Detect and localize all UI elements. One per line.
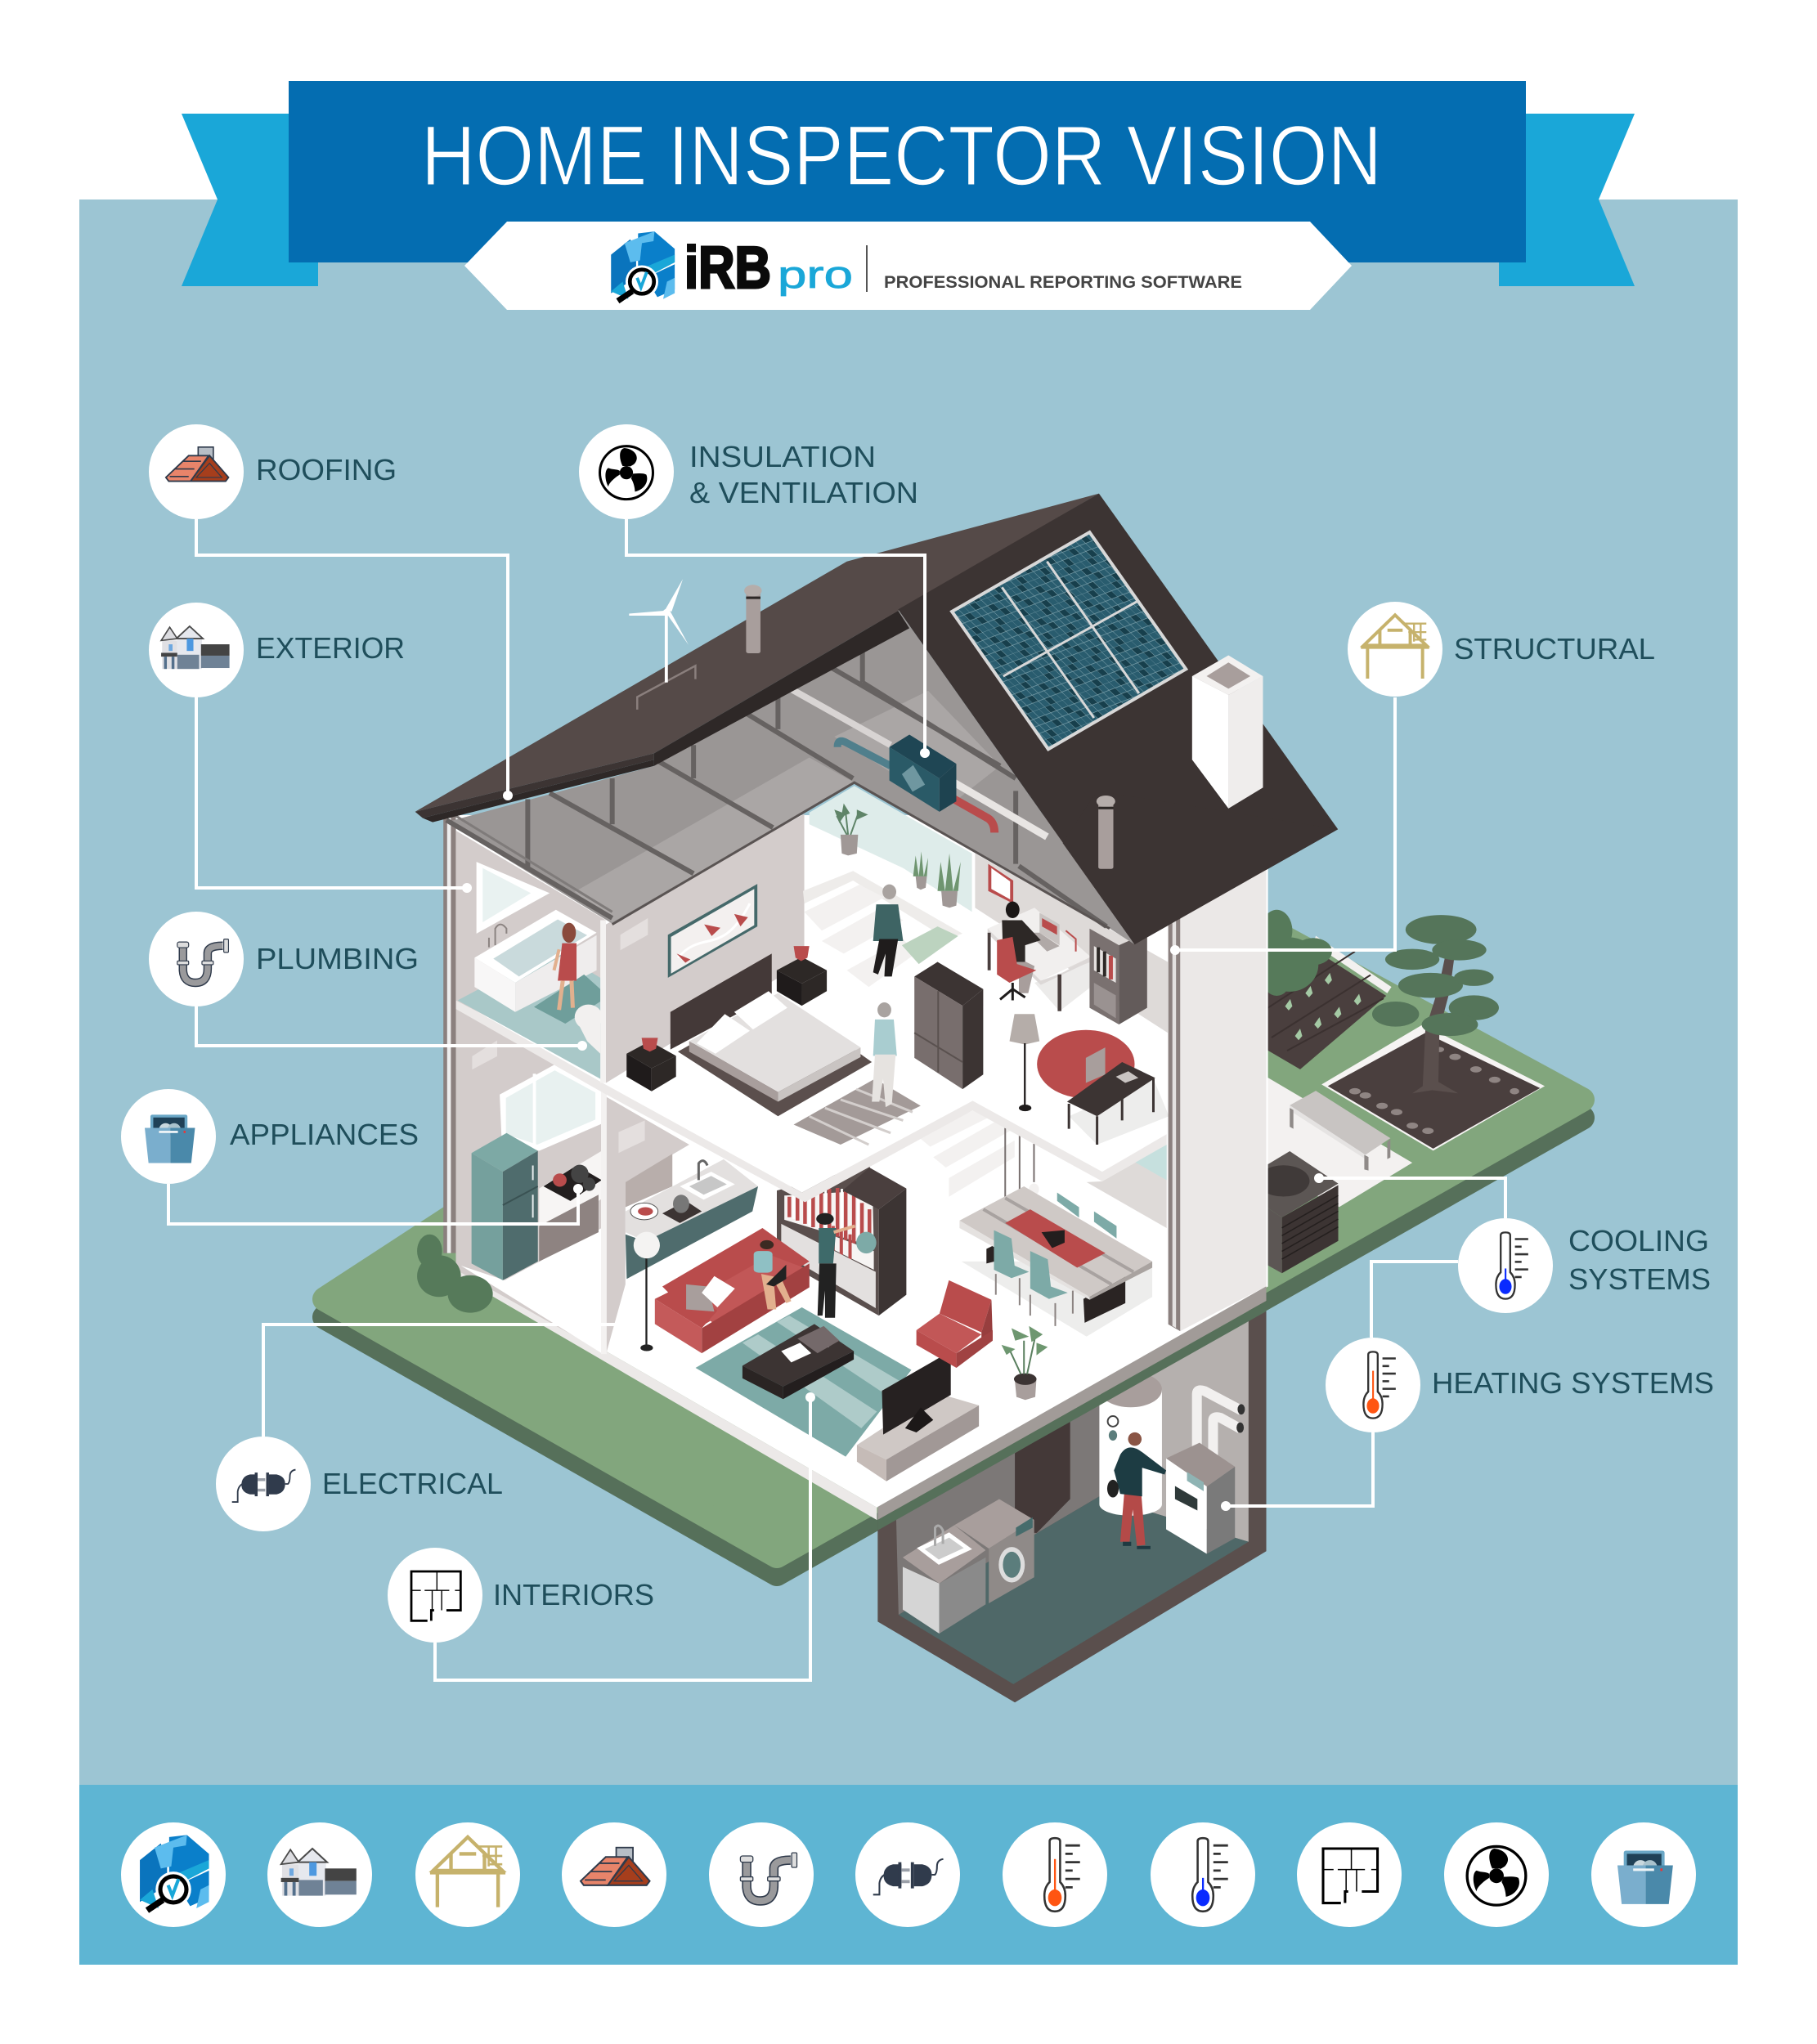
desk shadow [1034, 962, 1091, 1011]
floor front lip [458, 1266, 877, 1520]
tree bed with stones [1321, 1024, 1545, 1150]
connector: heating to cooling [1371, 1262, 1458, 1338]
connector: structural [1170, 697, 1395, 955]
vent [472, 1040, 497, 1069]
TV unit [857, 1393, 979, 1481]
connector: cooling [1314, 1173, 1505, 1218]
pendant lights [1000, 1128, 1039, 1217]
right nightstand [777, 946, 827, 1006]
callout: electrical: ELECTRICAL [322, 1467, 503, 1500]
potted plant [1002, 1326, 1048, 1400]
bathroom wall [455, 831, 606, 1078]
callout: plumbing [149, 912, 419, 1006]
basement left wall [896, 1392, 1099, 1615]
bottom icon: electrical [855, 1822, 960, 1927]
bottom icon: exterior [267, 1822, 372, 1927]
attic space [446, 609, 1135, 944]
left nightstand [626, 1038, 676, 1091]
washing machine [954, 1499, 1034, 1603]
title banner [289, 81, 1526, 262]
connector: electrical [263, 1320, 641, 1437]
laptop [1028, 912, 1060, 952]
connector: interiors [435, 1392, 815, 1680]
refrigerator [472, 1133, 538, 1280]
basement floor [899, 1496, 1249, 1684]
armchair [917, 1280, 993, 1368]
toilet [575, 1005, 602, 1054]
kitchen window [500, 1065, 602, 1151]
bathroom floor [458, 949, 602, 1079]
dividing wall [606, 1096, 689, 1354]
attic beams [446, 645, 1110, 929]
staircase upper with green mat [803, 871, 962, 987]
chimney repeat [1192, 676, 1263, 809]
bathroom window [477, 862, 550, 934]
background panel [79, 199, 1738, 1785]
bookcase [777, 1166, 906, 1316]
house right wall and floor edge [877, 868, 1267, 1531]
attic lighter floor right [834, 691, 1000, 808]
callout: exterior: EXTERIOR [256, 631, 405, 665]
logo: PROFESSIONAL REPORTING SOFTWARE [884, 273, 1242, 292]
elderly man walking [873, 885, 903, 976]
vegetable bed [1267, 936, 1392, 1069]
floor lamp upstairs [1009, 1014, 1039, 1111]
upper floor plate [606, 815, 1169, 1193]
desk [988, 908, 1091, 1011]
exterior wall [1180, 868, 1267, 1331]
kitchen counter and stove [539, 1151, 602, 1262]
wind turbine [629, 579, 695, 710]
basement [877, 1285, 1267, 1702]
bottom icon: appliances [1591, 1822, 1696, 1927]
kitchen niche [626, 1154, 672, 1208]
bottom icon: heating [1003, 1822, 1107, 1927]
callout: exterior [149, 603, 405, 697]
left outer column [443, 815, 456, 1253]
back wall with window [1087, 1145, 1167, 1228]
bottom icon: plumbing [709, 1822, 814, 1927]
bottom icon: logo [121, 1822, 226, 1927]
house upper floor [415, 494, 1338, 1145]
right vent repeat [1097, 796, 1115, 869]
staircase lower [917, 1107, 1015, 1197]
left roof plane [415, 494, 1099, 812]
bathtub [474, 910, 597, 1012]
shelf unit [1089, 929, 1147, 1024]
bottom icon: cooling [1151, 1822, 1255, 1927]
right ribbon tail [1499, 114, 1635, 286]
kitchen island [626, 1159, 758, 1279]
front dining chairs [994, 1230, 1073, 1326]
vent [618, 1120, 645, 1153]
upper partition wall [606, 814, 805, 1083]
partition post [600, 921, 606, 1083]
basement door [1015, 1421, 1070, 1533]
roof eave [415, 753, 654, 823]
dining table [959, 1186, 1152, 1323]
kitchen floor [461, 1228, 602, 1353]
ground floor base [456, 815, 1268, 1508]
bottom icon: interiors [1297, 1822, 1402, 1927]
work table with chair [1067, 1047, 1169, 1145]
air conditioner [1258, 1151, 1339, 1273]
bottom icon: structural [415, 1822, 520, 1927]
teal rug [696, 1307, 911, 1457]
floor lamp [634, 1232, 660, 1351]
attic lighter floor left [575, 758, 855, 922]
solar panels [952, 532, 1186, 749]
roof underside band [654, 611, 909, 766]
callout: electrical [216, 1437, 503, 1531]
callout: roofing: ROOFING [256, 453, 397, 486]
kitchen wall [456, 1003, 605, 1353]
basement outer shell [877, 1285, 1267, 1702]
bottom icon: ventilation [1444, 1822, 1549, 1927]
callout: interiors: INTERIORS [493, 1578, 654, 1611]
wardrobe [914, 962, 983, 1089]
logo [611, 231, 1242, 301]
soil strip [877, 1301, 1267, 1531]
back dining chairs [1057, 1193, 1116, 1239]
furnace [1166, 1390, 1245, 1553]
back windows [810, 786, 972, 912]
bushes [1261, 910, 1332, 996]
roof vent pipe left [744, 585, 762, 653]
callout: appliances: APPLIANCES [230, 1118, 419, 1151]
television [882, 1351, 951, 1435]
office chair [997, 937, 1036, 1000]
garden and yard [1258, 910, 1545, 1273]
callout: cooling systems [1458, 1218, 1711, 1313]
wall art [988, 864, 1013, 903]
callout: appliances [121, 1089, 419, 1184]
wall column [1169, 868, 1180, 1331]
roof tip over wall [1063, 676, 1338, 944]
callout: cooling systems: SYSTEMS [1568, 1262, 1711, 1296]
bench [1290, 1091, 1390, 1171]
dividing wall post [601, 1087, 607, 1354]
left ribbon tail [182, 114, 318, 286]
red sofa [655, 1228, 810, 1353]
callout: plumbing: PLUMBING [256, 942, 419, 975]
vent [621, 918, 648, 950]
right roof plane overlap [1063, 791, 1338, 944]
standing woman [816, 1213, 855, 1318]
striped rug [794, 1078, 921, 1145]
dining area shadow [962, 1262, 1152, 1337]
round red rug [1037, 1030, 1135, 1098]
ground slab lawn [325, 818, 1582, 1556]
ground slab side [325, 836, 1582, 1574]
callout: structural [1348, 602, 1655, 697]
connector: appliances [168, 1184, 583, 1224]
callout: insulation and ventilation [579, 424, 918, 519]
right roof plane [898, 494, 1338, 944]
white chimney [1192, 656, 1263, 809]
bath mat [534, 975, 600, 1024]
floor slab edge [456, 999, 1167, 1202]
tree [1372, 915, 1499, 1093]
callout: structural: STRUCTURAL [1454, 632, 1655, 666]
snake plants [913, 851, 961, 908]
logo: iRB [684, 235, 771, 301]
back right wall [975, 854, 1168, 1033]
connector: roofing [196, 519, 513, 800]
man at furnace [1107, 1432, 1166, 1549]
connector: exterior [196, 697, 472, 893]
connector: insulation [626, 519, 930, 758]
callout: heating systems: HEATING SYSTEMS [1432, 1366, 1714, 1400]
roof vent pipe right [1097, 796, 1115, 869]
man at desk [1002, 902, 1041, 993]
bottom icon: roofing [562, 1822, 666, 1927]
bottom icon band [79, 1785, 1738, 1965]
basement right wall [1099, 1306, 1249, 1542]
bushes [417, 1235, 493, 1313]
floor edge strip [877, 1286, 1267, 1520]
connector: heating [1221, 1432, 1373, 1511]
coffee table [743, 1324, 854, 1399]
callout: interiors [388, 1548, 654, 1643]
patio [1267, 1077, 1412, 1207]
callout: insulation and ventilation: INSULATION [689, 440, 876, 473]
desk lamp [1066, 930, 1076, 952]
house lower floor [417, 815, 1268, 1520]
bed [671, 953, 872, 1116]
water heater [1099, 1372, 1162, 1516]
woman in bathroom [554, 923, 577, 1010]
callout: insulation and ventilation: & VENTILATION [689, 476, 918, 509]
utility sink cabinet [903, 1525, 985, 1634]
woman standing [872, 1002, 897, 1107]
title: HOME INSPECTOR VISION [421, 109, 1382, 204]
duct and ventilation unit [791, 688, 1047, 836]
logo plate [464, 222, 1352, 310]
callout: roofing [149, 424, 397, 519]
seated person [754, 1240, 792, 1310]
connector: plumbing [196, 1006, 587, 1051]
callout: heating systems [1326, 1338, 1714, 1432]
logo: pro [778, 253, 853, 296]
callout: cooling systems: COOLING [1568, 1224, 1709, 1257]
pot plant on stairs [834, 804, 868, 855]
artwork [668, 884, 757, 978]
